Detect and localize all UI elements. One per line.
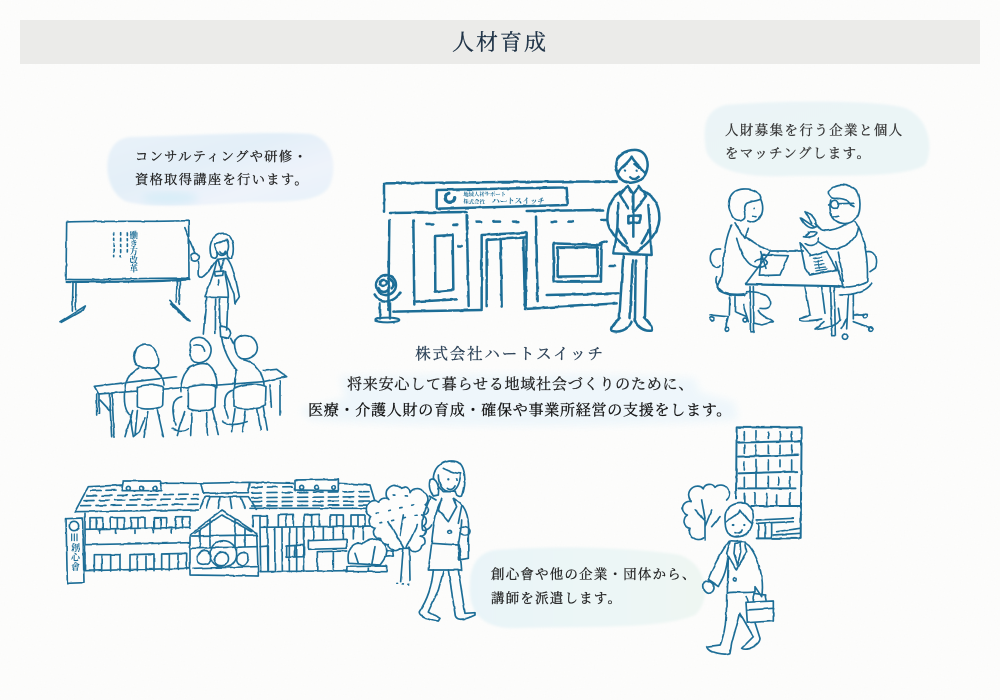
- client man: [800, 185, 877, 339]
- office tower: [736, 427, 802, 538]
- callout: instructors: [470, 548, 705, 628]
- callout: instructors: 講師を派遣します。: [491, 590, 622, 606]
- whiteboard: 働き方改革: [129, 230, 138, 273]
- illustration: consultation: [710, 185, 877, 339]
- illustration: 創心會 facility: [66, 479, 428, 585]
- signboard: [66, 518, 84, 583]
- company description: 将来安心して暮らせる地域社会づくりのために、: [347, 375, 694, 393]
- consultant woman: [710, 189, 773, 331]
- whiteboard: [60, 221, 190, 322]
- callout: instructors: 創心會や他の企業・団体から、: [491, 566, 697, 582]
- teacher: [184, 228, 239, 334]
- tree beside tower: [682, 484, 729, 540]
- company description: [300, 345, 738, 426]
- title bar: 人材育成: [452, 30, 548, 55]
- building: 株式会社: [463, 197, 485, 205]
- building: ハートスイッチ: [492, 196, 545, 205]
- illustrations: walking figures and office tower: [419, 427, 802, 655]
- left wing: [85, 513, 190, 572]
- businesswoman on phone: [419, 461, 475, 621]
- right wing: [253, 514, 393, 572]
- callout: training: [107, 133, 333, 206]
- callout: matching: [705, 102, 929, 176]
- company description: 医療・介護人財の育成・確保や事業所経営の支援をします。: [308, 401, 732, 419]
- company description: 株式会社ハートスイッチ: [415, 345, 605, 363]
- entrance gable: [190, 510, 258, 576]
- callout: matching: 人財募集を行う企業と個人: [725, 122, 904, 138]
- building: 地域人材サポート: [463, 190, 506, 198]
- table with laptop: [746, 242, 843, 336]
- potted plant: [375, 275, 400, 322]
- callout: training: コンサルティングや研修・: [135, 149, 308, 164]
- illustration: office front with staff: [375, 150, 659, 332]
- title bar: [20, 20, 980, 64]
- illustration: seminar: [60, 221, 287, 437]
- students at desk: [94, 327, 287, 437]
- roof: [75, 479, 375, 512]
- signboard: 創心會: [68, 542, 80, 572]
- staff member: [607, 150, 659, 332]
- callout: training: 資格取得講座を行います。: [135, 171, 309, 187]
- businessman with briefcase: [703, 503, 773, 655]
- building: [384, 181, 618, 312]
- callout: matching: をマッチングします。: [725, 146, 871, 161]
- tree: [366, 485, 428, 585]
